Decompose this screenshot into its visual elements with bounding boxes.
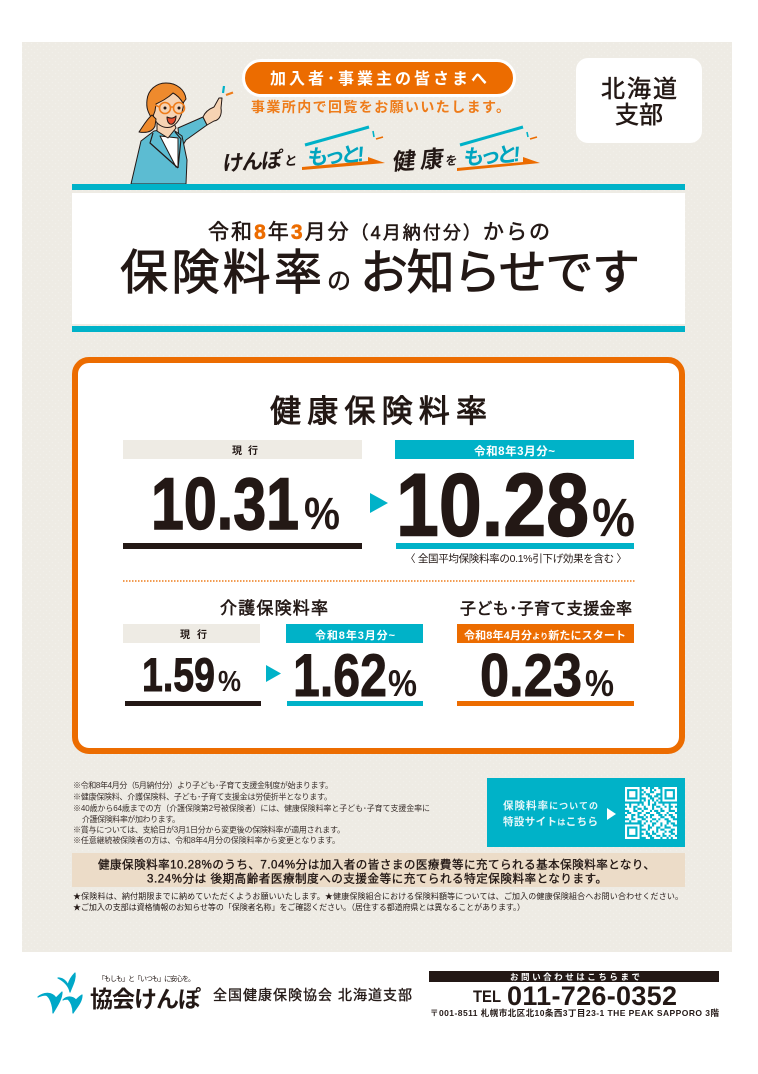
notes list: ※賞与については、支給日が3月1日分から変更後の保険料率が適用されます。 (73, 824, 345, 834)
title line 1: effective date: 令和8年3月分（4月納付分）からの (208, 221, 550, 244)
icon: swallows (38, 973, 82, 1013)
site link panel with QR code (487, 778, 685, 847)
band: rate breakdown: 3.24%分は 後期高齢者医療制度への支援金等に充てられる特定保険料率となります。 (147, 872, 607, 886)
child support rate: % (585, 663, 614, 704)
new health rate: 令和8年3月分~ (474, 444, 555, 458)
current health rate: 現行 (232, 444, 258, 457)
slogan: kenpo motto: けんぽ (221, 148, 285, 176)
child support rate: 令和8年4月分より新たにスタート (464, 628, 626, 642)
contact block (429, 971, 719, 1018)
new nursing rate: % (388, 663, 417, 704)
current health rate: 10.31 (151, 464, 299, 545)
new nursing rate: 1.62 (293, 642, 387, 709)
notes list: ※令和8年4月分（5月納付分）より子ども･子育て支援金制度が始まります。 (73, 780, 333, 790)
organisation name: 全国健康保険協会 北海道支部 (213, 987, 412, 1003)
main title (120, 247, 640, 300)
arrow (370, 493, 388, 513)
star notes: ★ご加入の支部は資格情報のお知らせ等の「保険者名称」をご確認ください。（居住する都道府県とは異なることがあります。） (73, 902, 525, 912)
new health rate: % (592, 488, 635, 548)
child support rate (457, 624, 634, 709)
footnote: reduction effect: 〈 全国平均保険料率の0.1%引下げ効果を含む 〉 (405, 552, 627, 565)
contact block: 〒001-8511 札幌市北区北10条西3丁目23-1 THE PEAK SAPPORO 3階 (430, 1008, 719, 1018)
new nursing rate: 令和8年3月分~ (315, 628, 396, 642)
logo: Kyokai Kenpo: 「もしも」と「いつも」に安心を。 (98, 974, 195, 983)
orange pill heading: 加入者･事業主の皆さまへ (270, 69, 487, 88)
logo: Kyokai Kenpo: 協会けんぽ (90, 986, 201, 1012)
notes list: ※40歳から64歳までの方（介護保険第2号被保険者）には、健康保険料率と子ども･子育て支援金率に (73, 803, 430, 813)
notes list: 介護保険料率が加わります。 (82, 814, 180, 824)
orange pill heading (244, 60, 514, 96)
illustration: woman pointing (131, 83, 233, 184)
contact block: お問い合わせはこちらまで (510, 972, 640, 982)
new nursing rate (286, 624, 423, 709)
slogan: kenpo motto (221, 127, 385, 176)
site link panel with QR code: 保険料率についての (503, 799, 598, 812)
QR code (625, 787, 677, 839)
band: rate breakdown: 健康保険料率10.28%のうち、7.04%分は加入者の皆さまの医療費等に充てられる基本保険料率となり、 (98, 858, 655, 872)
subheading: circulate request: 事業所内で回覧をお願いいたします。 (251, 99, 510, 115)
notes list (73, 780, 430, 845)
band: rate breakdown (72, 853, 685, 887)
star notes (73, 891, 683, 912)
heading: health insurance rate: 健康保険料率 (270, 394, 487, 429)
heading: nursing care rate: 介護保険料率 (220, 599, 328, 618)
slogan: health motto (391, 127, 540, 175)
slogan: kenpo motto: と (284, 153, 298, 169)
child support rate: 0.23 (480, 642, 582, 709)
heading: child support rate: 子ども･子育て支援金率 (460, 600, 632, 618)
badge: Hokkaido branch (576, 58, 702, 143)
current health rate: % (304, 488, 340, 539)
new health rate: 10.28 (396, 454, 589, 554)
current nursing rate: 現行 (180, 628, 207, 641)
panel: rates (75, 360, 682, 751)
star notes: ★保険料は、納付期限までに納めていただくようお願いいたします。★健康保険組合における保険料額等については、ご加入の健康保険組合へお問い合わせください。 (73, 891, 683, 901)
main title: の (327, 268, 351, 295)
slogan: health motto: もっと! (463, 143, 521, 170)
current nursing rate (123, 624, 261, 706)
notes list: ※健康保険料、介護保険料、子ども･子育て支援金は労使折半となります。 (73, 792, 332, 802)
badge: Hokkaido branch: 支部 (615, 102, 663, 129)
slogan: health motto: 健康 (391, 145, 445, 175)
main title: 保険料率 (120, 247, 322, 300)
panel: beige background (22, 42, 732, 952)
arrow (266, 665, 281, 682)
title panel (72, 184, 685, 332)
site link panel with QR code: 特設サイトはこちら (503, 815, 598, 828)
current nursing rate: 1.59 (142, 648, 215, 701)
badge: Hokkaido branch: 北海道 (601, 76, 677, 103)
slogan: health motto: を (445, 153, 458, 168)
main title: お知らせです (360, 247, 640, 300)
contact block: 011-726-0352 (507, 981, 677, 1011)
notes list: ※任意継続被保険者の方は、令和8年4月分の保険料率から変更となります。 (73, 835, 340, 845)
current health rate (123, 440, 362, 549)
logo: Kyokai Kenpo (38, 973, 201, 1013)
contact block: TEL (473, 987, 501, 1006)
slogan: kenpo motto: もっと! (307, 143, 365, 170)
current nursing rate: % (218, 666, 241, 698)
